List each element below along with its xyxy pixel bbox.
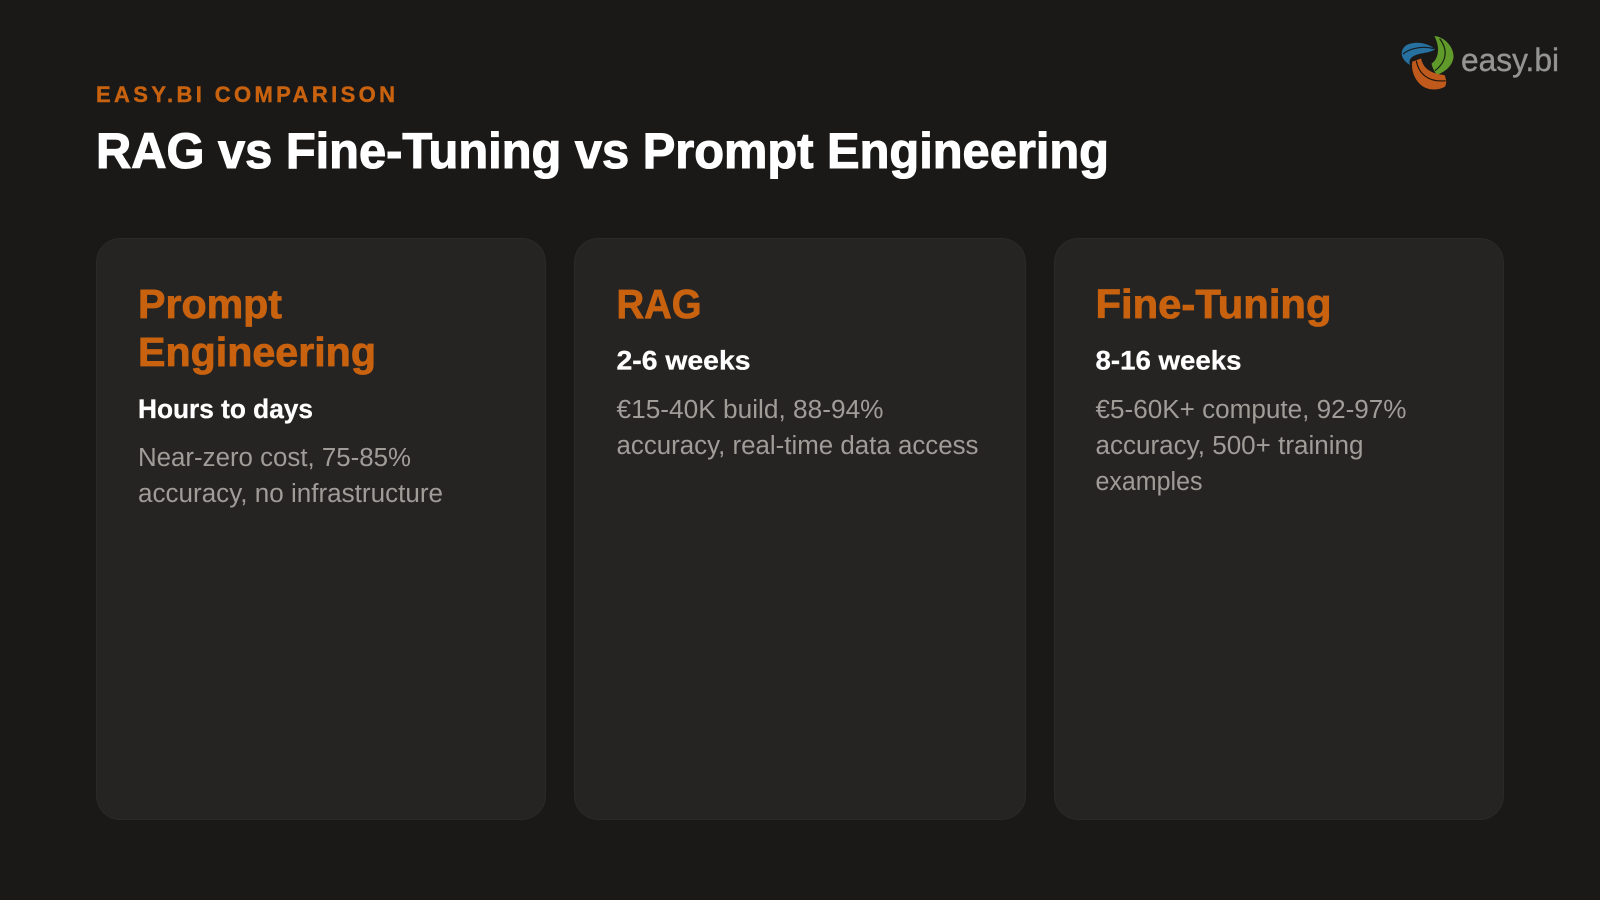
icon: tri-colour swoosh mark: [1402, 36, 1454, 89]
logo: easy.bi: [1402, 36, 1559, 89]
description: accuracy, no infrastructure: [138, 480, 443, 508]
card heading: Prompt: [138, 281, 282, 327]
description: examples: [1096, 468, 1202, 496]
timeframe: 2-6 weeks: [616, 346, 750, 376]
panel: RAG: [574, 238, 1026, 820]
title: RAG vs Fine-Tuning vs Prompt Engineering: [96, 123, 1109, 179]
eyebrow label: EASY.BI COMPARISON: [96, 82, 395, 107]
description: accuracy, real-time data access: [616, 432, 978, 460]
panel: Prompt Engineering: [96, 238, 546, 820]
description: [138, 444, 443, 508]
card background: [96, 238, 546, 820]
card heading: Fine-Tuning: [1096, 281, 1332, 327]
card background: [1054, 238, 1504, 820]
description: [616, 396, 978, 460]
logo wordmark: easy.bi: [1461, 42, 1559, 78]
timeframe: 8-16 weeks: [1096, 346, 1242, 376]
description: accuracy, 500+ training: [1096, 432, 1364, 460]
description: [1096, 396, 1406, 496]
timeframe: Hours to days: [138, 394, 313, 424]
card heading, second line: Engineering: [138, 329, 376, 375]
description: €5-60K+ compute, 92-97%: [1096, 396, 1406, 424]
card heading: RAG: [616, 281, 702, 327]
card background: [574, 238, 1026, 820]
panel: Fine-Tuning: [1054, 238, 1504, 820]
description: Near-zero cost, 75-85%: [138, 444, 411, 472]
description: €15-40K build, 88-94%: [616, 396, 884, 424]
